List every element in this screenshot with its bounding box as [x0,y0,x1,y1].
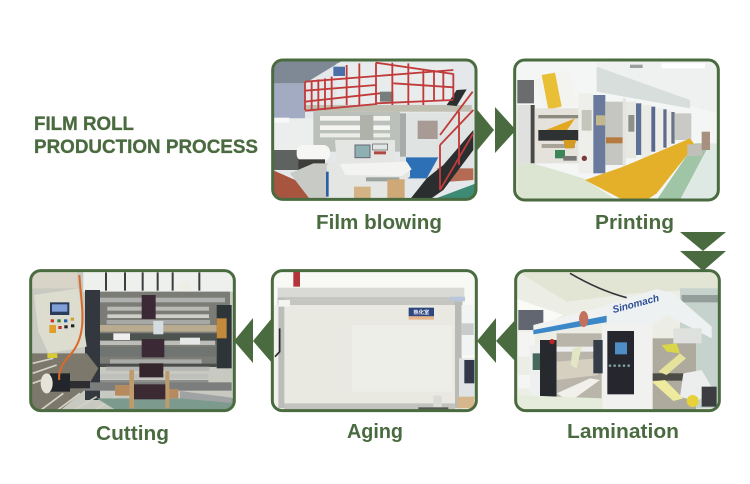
panel: lamination photo [516,271,719,411]
title: FILM ROLL [34,113,134,135]
arrow: printing to lamination [680,232,726,271]
label: aging: Aging [347,420,403,443]
panel: cutting photo [31,271,234,411]
panel: film blowing photo [273,60,476,199]
title: PRODUCTION PROCESS [34,136,258,158]
label: printing: Printing [595,211,674,234]
door sign: 熟化室 [413,308,430,316]
panel: printing photo [515,60,718,200]
machine brand text: Sinomach [611,293,660,316]
arrow: lamination to aging [477,318,517,363]
arrow: aging to cutting [234,318,272,363]
door sign [409,308,434,320]
panel: aging photo [272,271,476,411]
title [34,113,258,158]
arrow: film blowing to printing [475,107,516,153]
label: cutting: Cutting [96,422,169,445]
label: film blowing: Film blowing [316,211,442,234]
label: lamination: Lamination [567,420,679,443]
